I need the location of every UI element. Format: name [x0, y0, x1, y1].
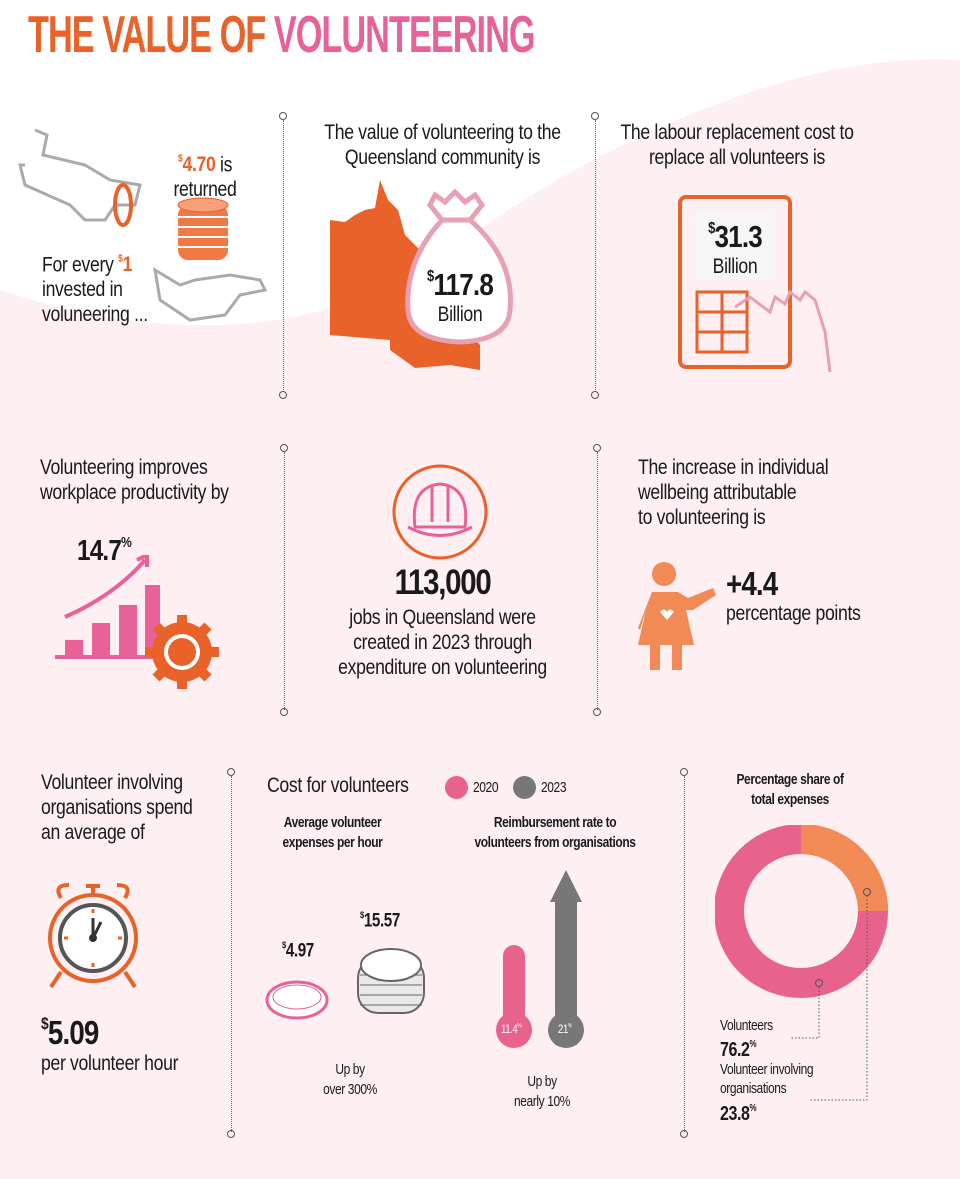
- text: organisations 23.8%: Volunteer involving: [720, 1061, 813, 1078]
- panel: labour replacement: [620, 121, 854, 372]
- text: $31.3 Billion: $31.3: [708, 219, 762, 254]
- icon: bar chart with gear: [55, 555, 219, 689]
- text: $31.3 Billion: [708, 219, 762, 278]
- text: heading: [638, 456, 828, 529]
- icon: coin stack and hand: [153, 198, 268, 322]
- text: reimbursement subheading: Reimbursement rate to: [494, 814, 616, 831]
- panel: jobs: [338, 464, 547, 679]
- text: $4.70 returned: [173, 153, 237, 201]
- text: heading: The increase in individual: [638, 456, 828, 479]
- chart: thermometer bars: [496, 870, 584, 1048]
- text: $117.8 Billion: Billion: [438, 303, 482, 326]
- dividers row 2: [284, 452, 285, 710]
- legend: [445, 776, 566, 799]
- icon: hand dropping coin: [18, 128, 142, 227]
- text: heading: organisations spend: [41, 796, 193, 819]
- text: up by nearly 10%: [514, 1073, 570, 1110]
- icon: hard hat in circle: [392, 464, 488, 560]
- text: volunteers 76.2%: 76.2%: [720, 1039, 756, 1061]
- text: heading: [40, 456, 229, 504]
- text: up by over 300%: Up by: [335, 1061, 365, 1078]
- text: organisations 23.8%: 23.8%: [720, 1103, 756, 1125]
- text: jobs description: [338, 606, 547, 679]
- text: heading: [620, 121, 854, 169]
- text: $117.8 Billion: [427, 267, 494, 326]
- text: $117.8 Billion: $117.8: [427, 267, 493, 302]
- icon: calculator with hand: [678, 195, 832, 372]
- text: heading: Cost for volunteers: [267, 774, 409, 797]
- text: for every $1: [42, 253, 148, 326]
- text: heading: an average of: [41, 821, 145, 844]
- legend: 2023: [541, 779, 566, 796]
- text: avg expenses subheading: [283, 814, 383, 851]
- text: jobs description: expenditure on volunteering: [338, 656, 547, 679]
- panel: value to community: [324, 121, 561, 370]
- text: volunteers 76.2%: Volunteers: [720, 1017, 773, 1034]
- panel: productivity: [40, 456, 229, 689]
- text: avg expenses subheading: Average volunteer: [284, 814, 381, 831]
- panel: percentage share: [715, 771, 888, 1125]
- legend: 2020: [473, 779, 498, 796]
- text: $5.09 per volunteer hour: [41, 1014, 178, 1075]
- text: heading: Volunteering improves: [40, 456, 207, 479]
- text: heading: total expenses: [751, 791, 829, 808]
- panel: wellbeing: [638, 456, 861, 670]
- text: heading: [41, 771, 193, 844]
- text: $5.09 per volunteer hour: per volunteer hour: [41, 1052, 178, 1075]
- text: heading: Queensland community is: [345, 146, 540, 169]
- text: heading: The labour replacement cost to: [620, 121, 854, 144]
- text: for every $1: For every $1: [42, 253, 132, 276]
- text: up by over 300%: [323, 1061, 377, 1098]
- icon: alarm clock: [48, 883, 138, 988]
- text: +4.4 percentage points: +4.4: [726, 565, 777, 602]
- text: jobs description: jobs in Queensland were: [349, 606, 536, 629]
- text: heading: The value of volunteering to the: [324, 121, 561, 144]
- icon: Queensland map with money bag: [330, 180, 513, 370]
- text: heading: wellbeing attributable: [638, 481, 796, 504]
- text: heading: to volunteering is: [638, 506, 765, 529]
- text: $31.3 Billion: Billion: [713, 255, 757, 278]
- text: up by nearly 10%: nearly 10%: [514, 1093, 570, 1110]
- chart: coin comparison: [266, 910, 425, 1020]
- text: for every $1: voluneering ...: [42, 303, 148, 326]
- panel: cost for volunteers: [266, 774, 636, 1110]
- chart: thermometer bars: 11.4%: [501, 1022, 521, 1036]
- text: organisations 23.8%: [720, 1060, 813, 1125]
- text: reimbursement subheading: [474, 814, 636, 851]
- text: reimbursement subheading: volunteers from organisations: [474, 834, 636, 851]
- text: heading: Volunteer involving: [41, 771, 183, 794]
- text: for every $1: invested in: [42, 278, 123, 301]
- text: 14.7%: 14.7%: [77, 535, 131, 567]
- text: avg expenses subheading: expenses per hour: [283, 834, 382, 851]
- text: heading: replace all volunteers is: [649, 146, 825, 169]
- text: +4.4 percentage points: [726, 565, 861, 625]
- text: heading: workplace productivity by: [40, 481, 229, 504]
- text: up by over 300%: over 300%: [323, 1081, 377, 1098]
- text: 113,000: 113,000: [395, 563, 490, 602]
- text: heading: [324, 121, 561, 169]
- chart: donut: [715, 825, 895, 1115]
- text: heading: [736, 771, 844, 808]
- icon: person with heart: [638, 562, 716, 670]
- text: +4.4 percentage points: percentage points: [726, 602, 861, 625]
- dividers row 3: [231, 776, 232, 1132]
- text: $5.09 per volunteer hour: $5.09: [41, 1014, 98, 1051]
- dividers row 1: [283, 120, 284, 392]
- text: volunteers 76.2%: [720, 1017, 773, 1061]
- panel: organisation spend: [41, 771, 193, 1075]
- text: heading: Percentage share of: [736, 771, 844, 788]
- panel: return on investment: [18, 128, 268, 326]
- text: organisations 23.8%: organisations: [720, 1080, 786, 1097]
- chart: coin comparison: $4.97: [282, 940, 314, 962]
- text: $4.70 returned: $4.70 is: [178, 153, 232, 176]
- text: up by nearly 10%: Up by: [527, 1073, 557, 1090]
- chart: coin comparison: $15.57: [360, 910, 400, 932]
- title: THE VALUE OF VOLUNTEERING: [28, 6, 535, 64]
- chart: thermometer bars: 21%: [558, 1022, 572, 1036]
- text: $4.70 returned: returned: [173, 178, 237, 201]
- background wave: [0, 0, 960, 325]
- text: jobs description: created in 2023 through: [353, 631, 532, 654]
